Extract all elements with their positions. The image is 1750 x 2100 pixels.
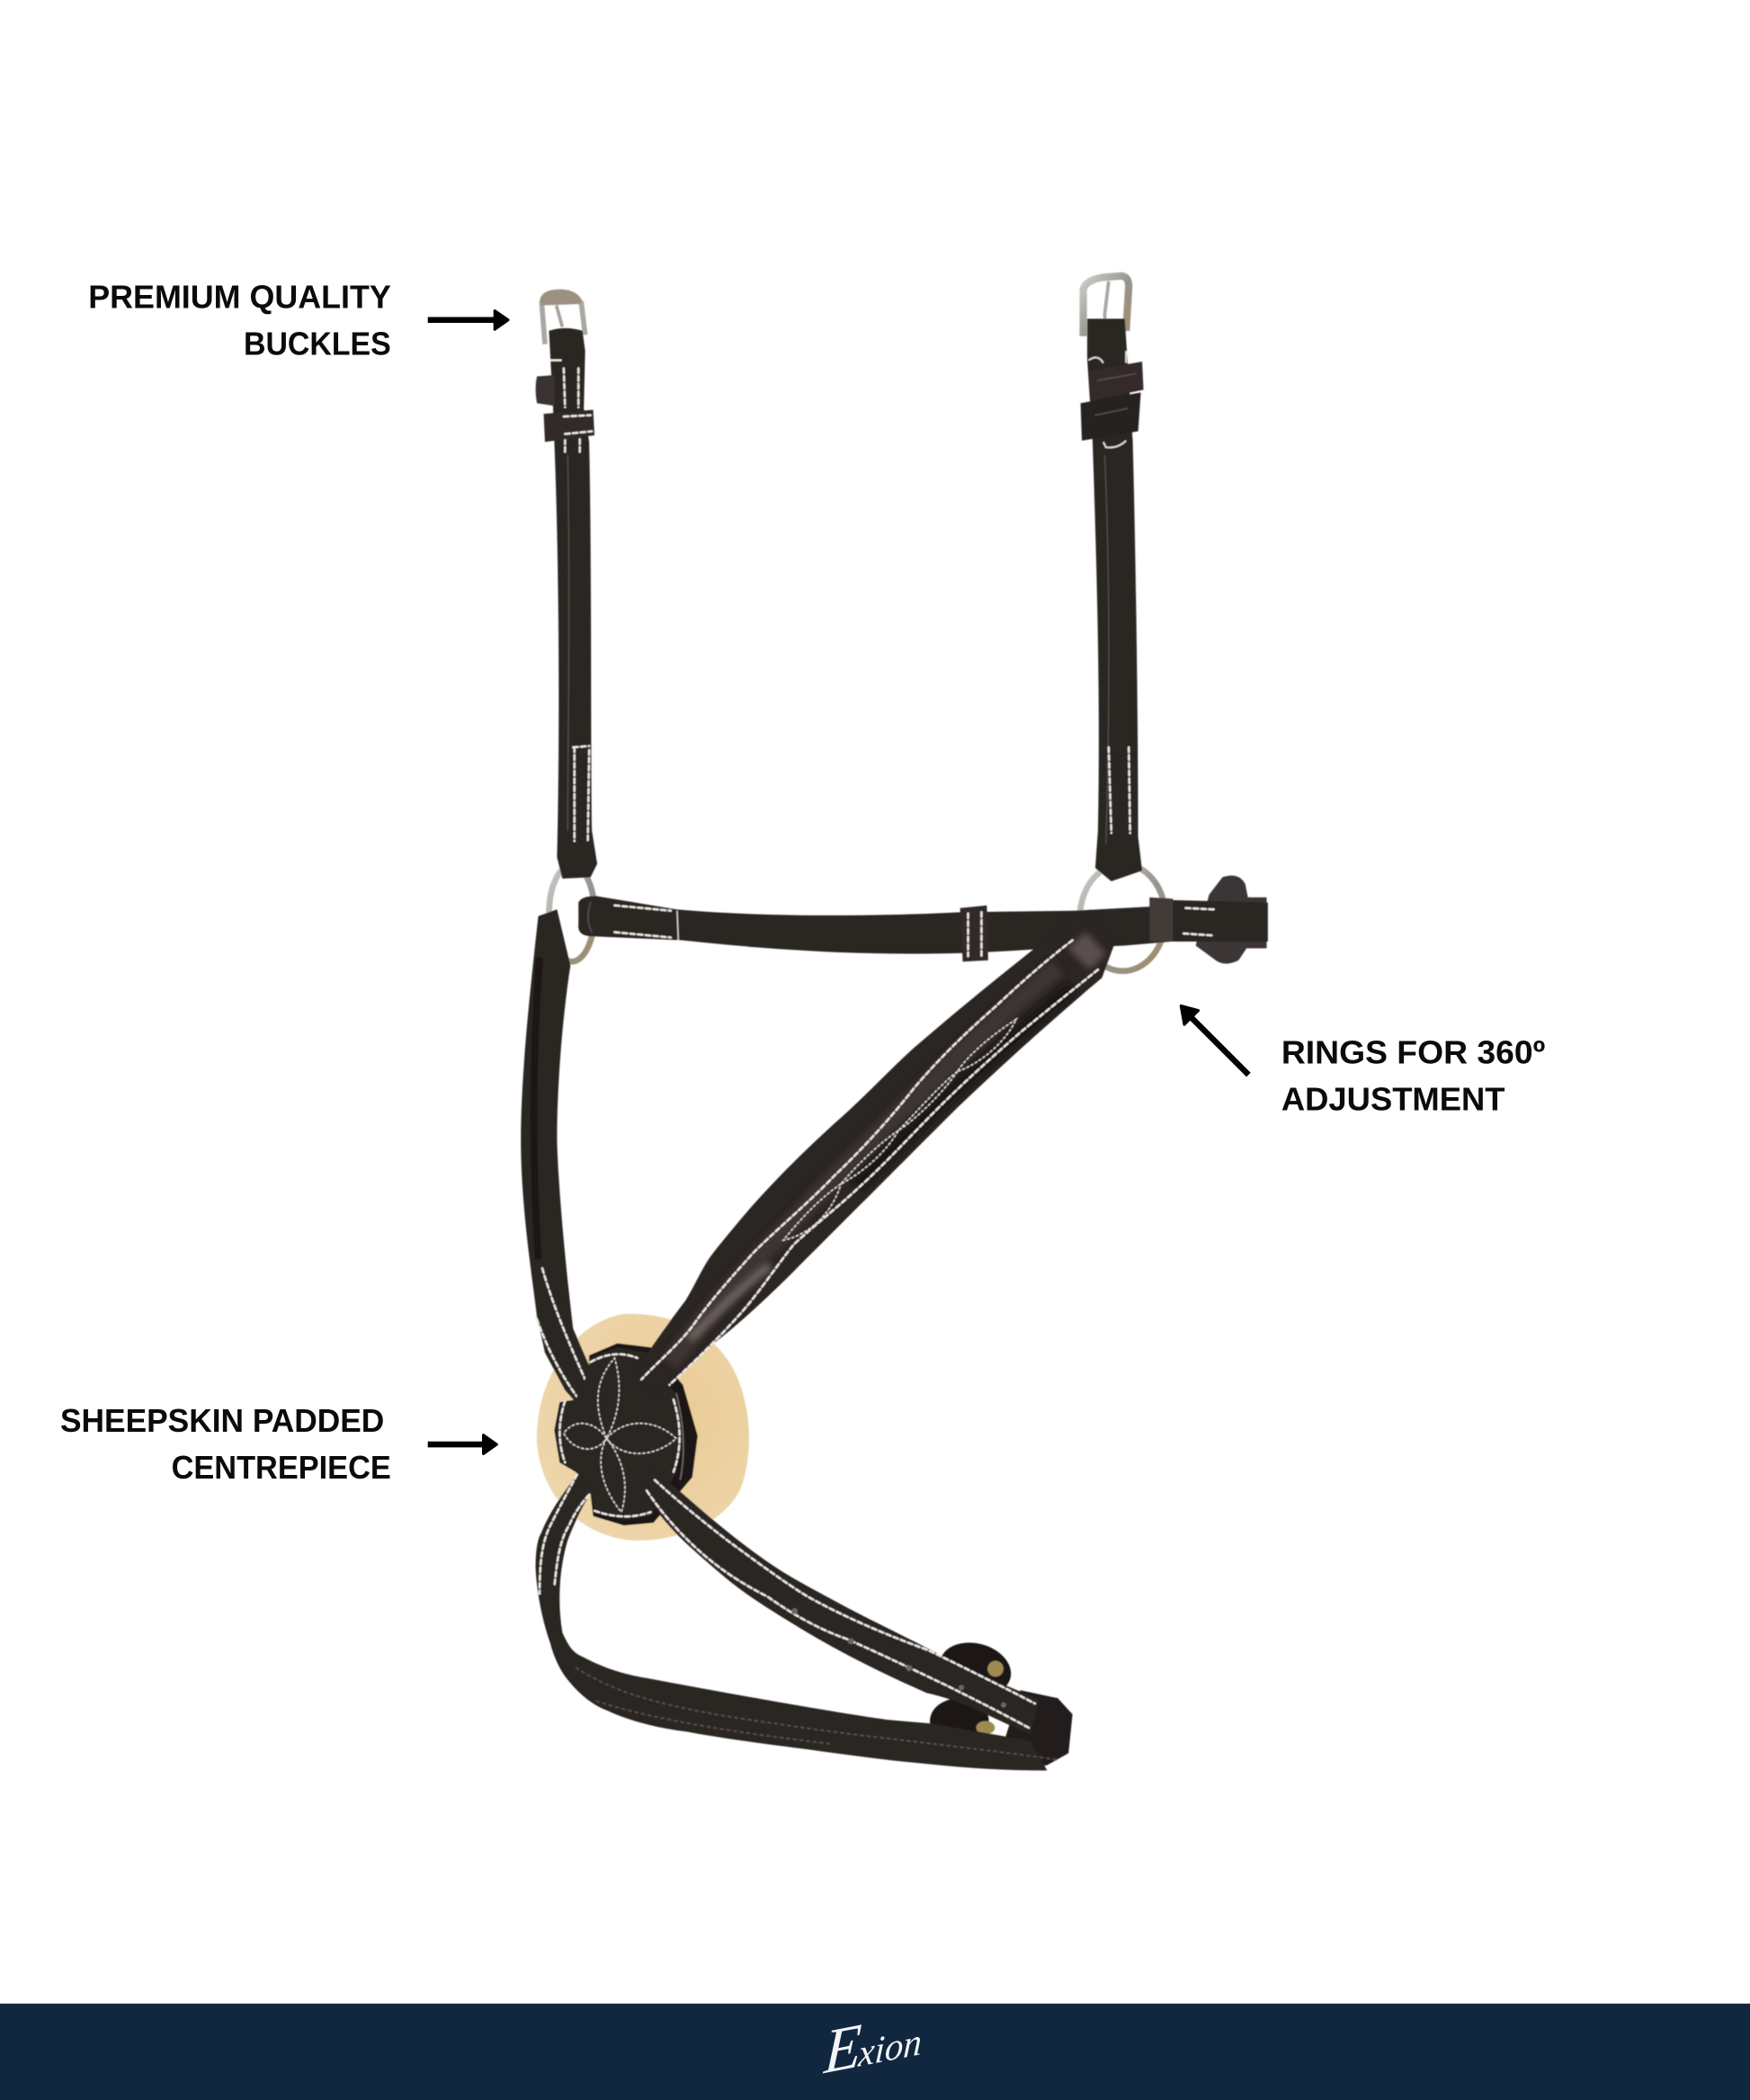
callout: sheepskin padded centrepiece bbox=[60, 1402, 496, 1486]
strap buckle end bbox=[1004, 1690, 1073, 1768]
callout text: buckles bbox=[88, 279, 391, 362]
right strap end fitting bbox=[1196, 876, 1267, 963]
left buckle bbox=[540, 290, 585, 344]
left small keeper bbox=[536, 375, 554, 406]
callout: rings for 360 adjustment bbox=[1181, 1005, 1545, 1118]
callout text: buckles: PREMIUM QUALITY bbox=[88, 279, 391, 316]
right ring bbox=[1080, 864, 1165, 971]
right keeper one bbox=[1088, 362, 1144, 400]
arrow: to ring bbox=[1181, 1005, 1248, 1075]
callout: premium quality buckles bbox=[88, 279, 508, 362]
lower left strap loop bbox=[536, 1473, 1058, 1771]
lower right strap bbox=[647, 1470, 1039, 1734]
footer band bbox=[0, 1998, 1750, 2100]
strap end disc and brass studs bbox=[930, 1635, 1017, 1744]
padded diagonal strap bbox=[635, 909, 1115, 1399]
small keeper bbox=[960, 906, 988, 961]
horizontal strap bbox=[578, 876, 1268, 963]
end keeper bbox=[1149, 898, 1173, 942]
callout text: rings: RINGS FOR 360º bbox=[1281, 1033, 1545, 1070]
callout text: centrepiece: SHEEPSKIN PADDED bbox=[60, 1402, 384, 1439]
left main keeper bbox=[543, 410, 594, 442]
callout text: centrepiece: CENTREPIECE bbox=[172, 1449, 391, 1486]
product photo: leather noseband bbox=[521, 276, 1268, 1771]
left upright strap bbox=[536, 328, 597, 879]
right buckle bbox=[1084, 276, 1129, 343]
sheepskin padding bbox=[537, 1314, 749, 1541]
left ring bbox=[549, 865, 594, 961]
centrepiece with stitched flower bbox=[554, 1344, 698, 1525]
callout text: centrepiece bbox=[60, 1402, 391, 1486]
callout text: buckles: BUCKLES bbox=[244, 326, 391, 362]
logo: Exion: Exion bbox=[822, 1998, 924, 2088]
right upright strap bbox=[1081, 318, 1144, 881]
callout text: rings: ADJUSTMENT bbox=[1281, 1081, 1505, 1118]
arrow: to centrepiece bbox=[428, 1435, 496, 1453]
callout text: rings bbox=[1281, 1033, 1545, 1118]
left padded strap bbox=[521, 909, 591, 1402]
right keeper two bbox=[1081, 392, 1141, 441]
arrow: to buckle bbox=[428, 310, 508, 329]
